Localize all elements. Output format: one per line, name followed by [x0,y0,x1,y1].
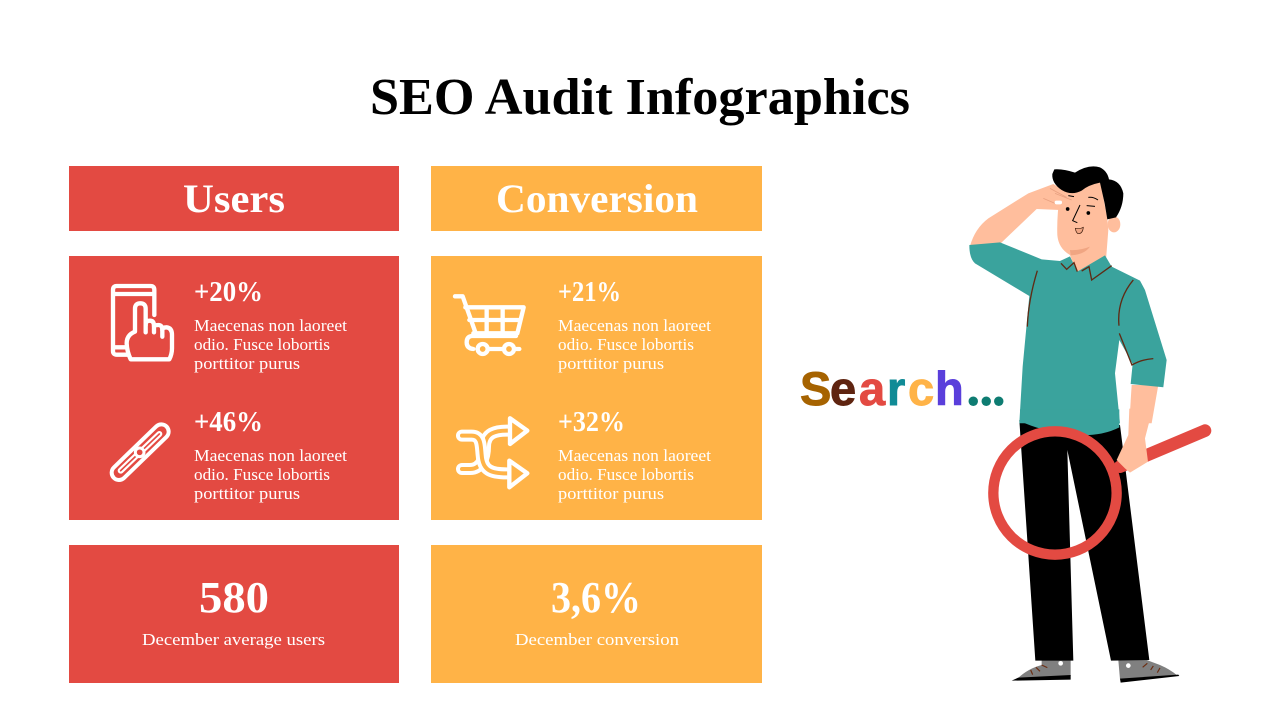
description: conversion stat two: porttitor purus [558,484,664,503]
panel: conversion header [431,166,762,231]
stat: +21%: +21% [558,277,621,308]
icon: chain link [119,432,161,473]
panel: users metrics [69,256,399,520]
search label: h [935,362,964,415]
search label: S [800,362,831,415]
value: 580: 580 [199,573,269,622]
description: users stat two: porttitor purus [194,484,300,503]
description: users stat one [194,316,347,373]
panel: users header [69,166,399,231]
pants and shoes [1012,420,1179,683]
icon: hand tapping phone [113,286,172,359]
description: users stat two: Maecenas non laoreet [194,446,347,465]
description: users stat one: porttitor purus [194,354,300,373]
illustration: man with magnifying glass [969,166,1205,683]
description: conversion stat one [558,316,711,373]
stat: +20%: +20% [194,277,263,308]
description: conversion stat one: porttitor purus [558,354,664,373]
search label: . [979,353,994,418]
caption: december average users: December average users [142,630,325,649]
search label: a [859,362,886,415]
heading: conversion: Conversion [496,176,698,221]
description: conversion stat one: odio. Fusce lobortis [558,335,694,354]
title: SEO Audit Infographics [370,69,910,126]
description: conversion stat two: Maecenas non laoreet [558,446,711,465]
description: conversion stat two: odio. Fusce lobortis [558,465,694,484]
description: conversion stat two [558,446,711,503]
description: users stat two: odio. Fusce lobortis [194,465,330,484]
icon: shopping cart [455,296,524,354]
search label: c [908,362,934,415]
value: 3,6%: 3,6% [551,573,641,622]
panel: december conversion [431,545,762,683]
description: users stat one: Maecenas non laoreet [194,316,347,335]
panel: december average users [69,545,399,683]
stat: +46%: +46% [194,407,263,438]
description: users stat two [194,446,347,503]
panel: conversion metrics [431,256,762,520]
heading: users: Users [183,176,285,221]
description: users stat one: odio. Fusce lobortis [194,335,330,354]
search label: r [887,362,905,415]
shirt and upper body [969,166,1167,423]
shirt hem, hand and magnifier [993,409,1205,555]
caption: december conversion: December conversion [515,630,679,649]
search label: . [992,353,1006,418]
stat: +32%: +32% [558,407,625,438]
search label: . [966,353,980,418]
search label: e [830,362,856,415]
description: conversion stat one: Maecenas non laoreet [558,316,711,335]
icon: shuffle arrows [462,418,527,487]
